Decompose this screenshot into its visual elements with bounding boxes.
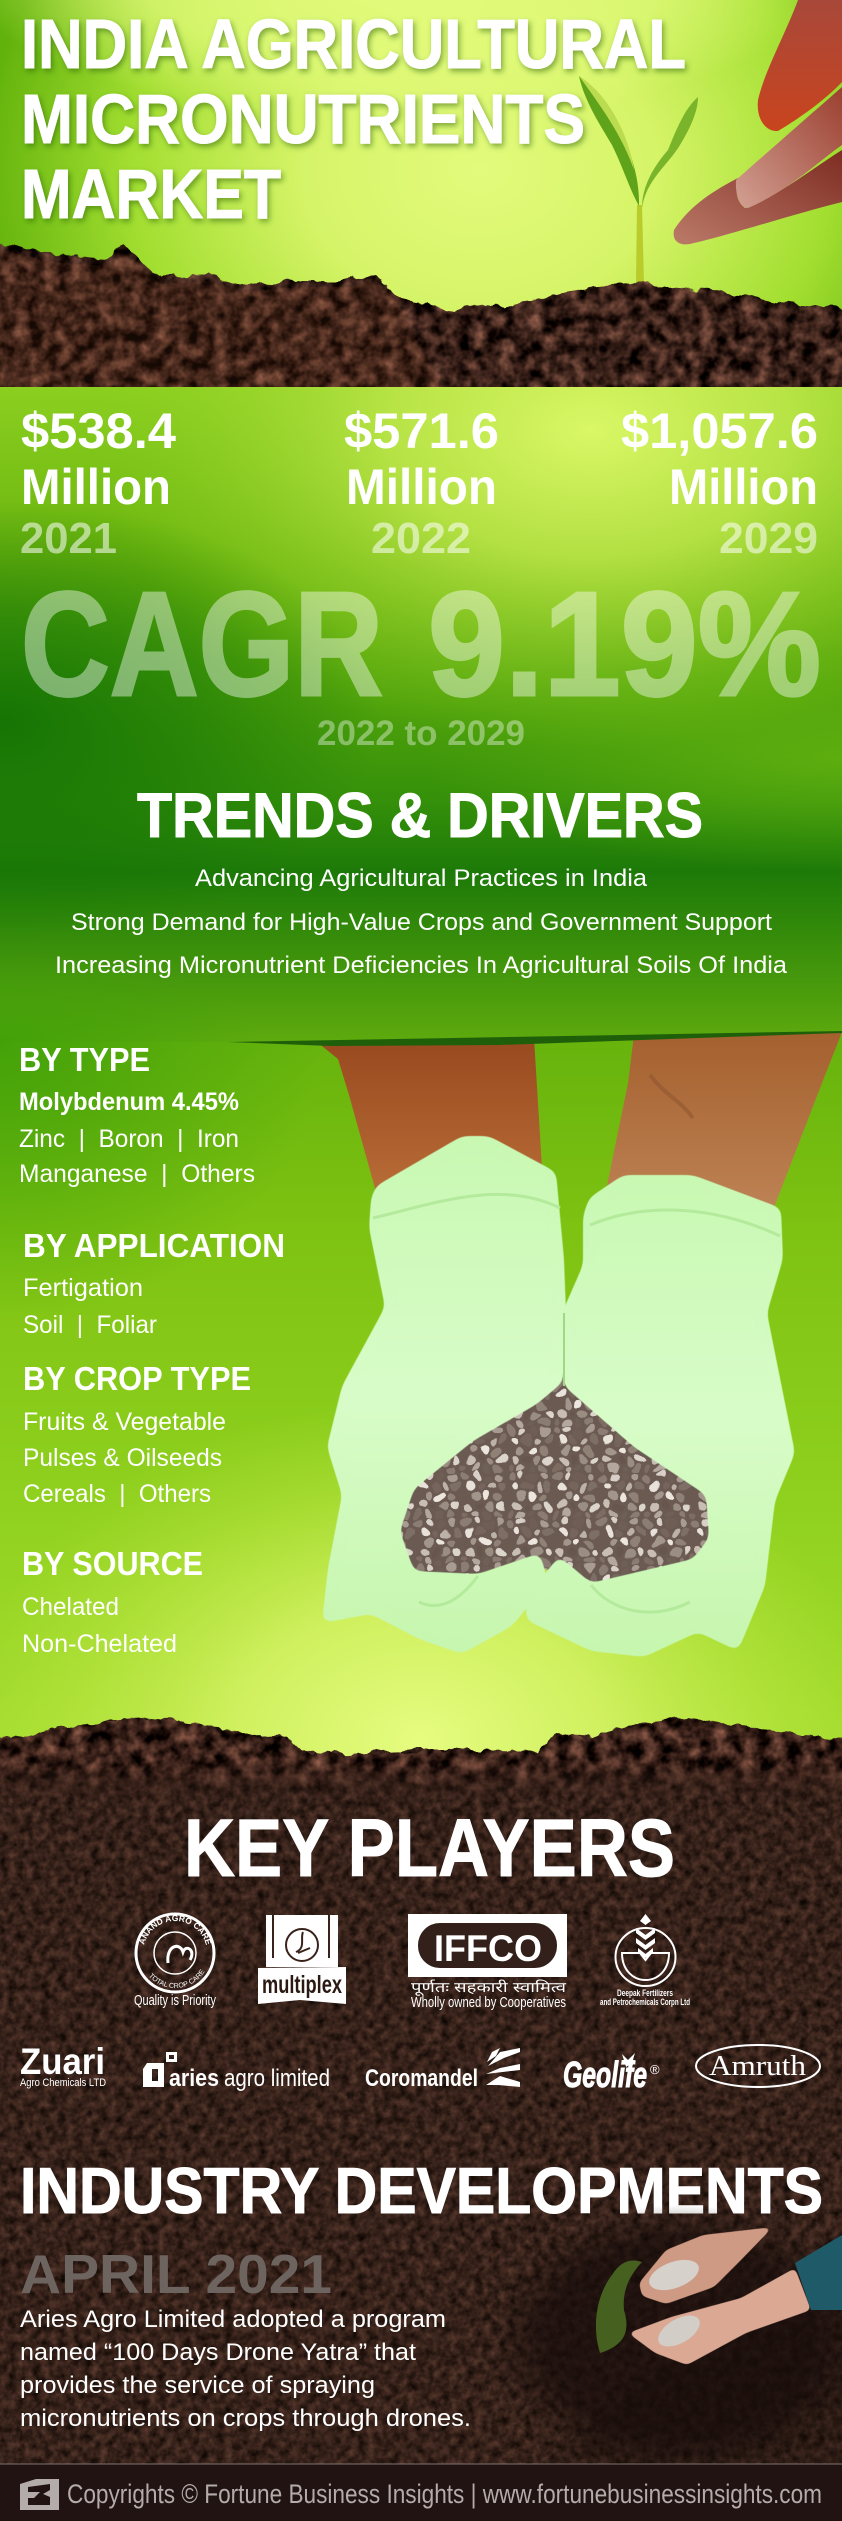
stat: 2029: Million: [669, 459, 818, 515]
segment: by application: Soil | Foliar: [23, 1311, 157, 1339]
stat: 2029: $1,057.6: [621, 403, 818, 459]
stat: 2021: [20, 403, 176, 563]
trends list: [55, 865, 788, 979]
logo: coromandel: Coromandel: [365, 2065, 478, 2092]
segment: by crop type: [23, 1360, 251, 1508]
stat: 2022: Million: [346, 459, 497, 515]
segment: by source: Non-Chelated: [22, 1630, 177, 1658]
segment: by crop type: Pulses & Oilseeds: [23, 1444, 222, 1472]
segment: by crop type: Cereals | Others: [23, 1480, 211, 1508]
logo: deepak fertilizers: [600, 1914, 690, 2007]
segment: by source: [22, 1545, 203, 1658]
logo: amruth: Amruth: [709, 2051, 806, 2082]
development description: provides the service of spraying: [20, 2372, 375, 2399]
stat: 2022: 2022: [371, 514, 471, 563]
footer bar: [0, 2464, 842, 2521]
stat: 2022: [344, 403, 499, 563]
logo: deepak fertilizers: and Petrochemicals Corpn Ltd: [600, 1997, 690, 2007]
stat: 2021: Million: [21, 459, 171, 515]
segment: by application: Fertigation: [23, 1274, 143, 1302]
cagr: [21, 562, 821, 727]
soil strip: [0, 240, 842, 420]
icon: seedling: [579, 76, 698, 283]
soil: key players background: [0, 1718, 842, 2521]
development description: named “100 Days Drone Yatra” that: [20, 2339, 416, 2366]
heading: trends and drivers: TRENDS & DRIVERS: [137, 781, 703, 851]
trends list: Strong Demand for High-Value Crops and Government Support: [71, 909, 772, 936]
segment: by application: [23, 1227, 285, 1339]
logo: aries agro: agro limited: [224, 2065, 330, 2092]
image: hands with granules over soil: [490, 2205, 842, 2475]
development description: [20, 2306, 471, 2432]
segment: by crop type: Fruits & Vegetable: [23, 1408, 226, 1436]
segment: by application: BY APPLICATION: [23, 1227, 285, 1264]
cagr: 9.19%: [428, 562, 821, 727]
date: april 2021: APRIL 2021: [20, 2243, 332, 2305]
stat: 2021: $538.4: [21, 403, 176, 459]
trends list: Advancing Agricultural Practices in India: [195, 865, 648, 892]
logo: zuari: Zuari: [20, 2041, 105, 2082]
logo: deepak fertilizers: Deepak Fertilizers: [617, 1988, 673, 1998]
title: [21, 5, 686, 233]
market panel background: [0, 387, 842, 1046]
logo: aries agro: [143, 2052, 330, 2092]
logo: coromandel: [365, 2048, 520, 2092]
logo: anand agro care: Quality is Priority: [134, 1992, 216, 2009]
title: INDIA AGRICULTURAL: [21, 5, 686, 83]
segment: by source: BY SOURCE: [22, 1545, 203, 1582]
lower green background: [0, 1000, 842, 1770]
segment: by type: [19, 1041, 255, 1188]
cagr: CAGR: [21, 562, 383, 727]
development description: Aries Agro Limited adopted a program: [20, 2306, 446, 2333]
logo: iffco: पूर्णतः सहकारी स्वामित्व: [411, 1979, 566, 1996]
hero background: [0, 0, 842, 390]
title: MARKET: [21, 155, 281, 233]
logo: iffco: [408, 1914, 567, 2011]
logo: zuari: Agro Chemicals LTD: [20, 2077, 106, 2089]
logo: geolife: ®: [650, 2062, 660, 2077]
logo: multiplex: [258, 1915, 346, 2004]
logo: iffco: Wholly owned by Cooperatives: [411, 1994, 566, 2011]
logo: amruth: [696, 2045, 820, 2087]
segment: by source: Chelated: [22, 1593, 119, 1621]
heading: key players: KEY PLAYERS: [184, 1803, 675, 1894]
logo: anand agro care: TOTAL CROP CARE: [150, 1969, 204, 1988]
image: gloved hands holding granules: [322, 1136, 795, 1657]
stat: 2021: 2021: [20, 514, 117, 563]
icon: fortune business insights logo: [20, 2479, 59, 2510]
stat: 2029: [621, 403, 818, 563]
development description: micronutrients on crops through drones.: [20, 2405, 471, 2432]
logo: iffco: IFFCO: [434, 1928, 542, 1969]
cagr period: 2022 to 2029: [317, 714, 525, 753]
logo: aries agro: aries: [169, 2065, 219, 2092]
segment: by crop type: BY CROP TYPE: [23, 1360, 251, 1397]
stat: 2029: 2029: [719, 514, 818, 563]
logo: anand agro care: [134, 1912, 216, 2009]
segment: by type: Molybdenum 4.45%: [19, 1088, 239, 1116]
title: MICRONUTRIENTS: [21, 80, 585, 158]
logo: multiplex: multiplex: [262, 1971, 342, 1999]
stat: 2022: $571.6: [344, 403, 499, 459]
segment: by type: Manganese | Others: [19, 1160, 255, 1188]
segment: by type: BY TYPE: [19, 1041, 150, 1078]
trends list: Increasing Micronutrient Deficiencies In Agricultural Soils Of India: [55, 952, 788, 979]
icon: fingers: [674, 0, 842, 244]
logo: geolife: Geolife: [563, 2054, 647, 2095]
segment: by type: Zinc | Boron | Iron: [19, 1125, 239, 1153]
arms: [317, 1032, 842, 1210]
logo: anand agro care: ANAND AGRO CARE: [140, 1916, 212, 1945]
